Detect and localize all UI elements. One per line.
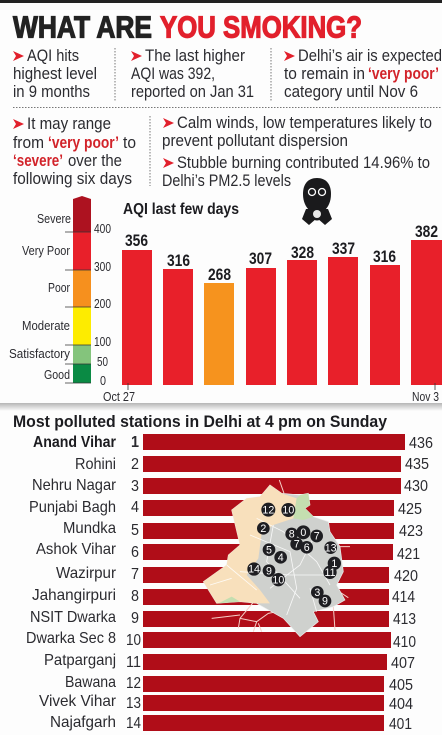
station names: Patparganj xyxy=(44,652,116,669)
AQI scale legend: 0 xyxy=(100,373,106,388)
station ranks: 8 xyxy=(131,588,139,605)
station names: Mundka xyxy=(63,520,116,537)
title xyxy=(13,10,362,44)
station values: 414 xyxy=(392,589,415,606)
bar chart: AQI last few days: 307 xyxy=(249,250,272,268)
internal roads xyxy=(210,518,337,615)
station ranks: 12 xyxy=(126,675,141,692)
station values: 405 xyxy=(389,677,413,694)
text block: AQI highest level: highest level xyxy=(13,65,97,83)
station ranks: 14 xyxy=(126,715,141,732)
station names: Dwarka Sec 8 xyxy=(26,630,116,647)
title: WHAT ARE xyxy=(13,10,152,44)
map roads outside boundary xyxy=(212,480,350,632)
station names: Nehru Nagar xyxy=(32,477,117,494)
bar chart: AQI last few days: 316 xyxy=(167,252,190,270)
text block: air expected to remain very poor: category until Nov 6 xyxy=(284,83,418,101)
AQI scale legend: 100 xyxy=(94,334,111,349)
station names: Bawana xyxy=(65,674,116,691)
station markers: 1 xyxy=(331,558,337,570)
text block: AQI highest level: in 9 months xyxy=(13,83,90,101)
station markers: 8 xyxy=(289,529,295,541)
bar chart: AQI last few days: 328 xyxy=(291,244,314,262)
station markers: 12 xyxy=(262,504,274,516)
title: YOU SMOKING? xyxy=(160,10,362,44)
AQI scale legend: 200 xyxy=(94,296,111,311)
text block: AQI highest level xyxy=(13,47,97,101)
station values: 407 xyxy=(391,655,415,672)
station markers: 6 xyxy=(304,542,310,554)
text block: may range very poor to severe: ‘severe’ xyxy=(13,152,63,170)
station markers: 7 xyxy=(314,531,320,543)
text block: stubble burning xyxy=(162,154,430,190)
text block: last higher AQI: The last higher xyxy=(145,47,245,65)
AQI scale legend: Satisfactory xyxy=(9,346,70,361)
green zones xyxy=(218,493,313,603)
station names: Najafgarh xyxy=(50,714,116,731)
AQI scale legend: 50 xyxy=(97,354,108,369)
text block: may range very poor to severe: over the xyxy=(68,152,122,170)
station ranks: 1 xyxy=(131,434,139,451)
AQI scale legend: Severe xyxy=(37,211,71,226)
station ranks: 3 xyxy=(131,478,139,495)
station ranks xyxy=(126,434,141,732)
AQI scale legend: 300 xyxy=(94,259,111,274)
station markers: 14 xyxy=(248,564,260,576)
bar chart: AQI last few days: 337 xyxy=(332,240,355,258)
station markers: 0 xyxy=(300,527,306,539)
text block: last higher AQI: reported on Jan 31 xyxy=(131,83,254,101)
station values: 401 xyxy=(389,716,412,733)
station values: 436 xyxy=(409,435,433,452)
station markers: 11 xyxy=(324,567,336,579)
station ranks: 6 xyxy=(131,544,139,561)
text block: stubble burning: Delhi’s PM2.5 levels xyxy=(162,172,291,190)
station ranks: 11 xyxy=(126,654,141,671)
bar chart: AQI last few days: 382 xyxy=(415,223,438,241)
severe band with arrow xyxy=(73,196,91,232)
text block: calm winds xyxy=(162,114,432,150)
icon: gas mask xyxy=(302,178,332,225)
AQI scale legend: Moderate xyxy=(22,318,70,333)
bar chart: AQI last few days: 268 xyxy=(208,266,231,284)
text block: air expected to remain very poor xyxy=(284,47,442,101)
station ranks: 13 xyxy=(126,695,141,712)
station values: 435 xyxy=(405,456,429,473)
station values: 425 xyxy=(398,501,422,518)
text block: may range very poor to severe xyxy=(13,115,136,188)
station markers: 10 xyxy=(282,505,294,517)
text block: may range very poor to severe: ‘very poor’ xyxy=(48,134,119,152)
station values: 410 xyxy=(393,634,416,651)
station markers xyxy=(247,503,341,608)
station values: 413 xyxy=(393,611,416,628)
station values: 404 xyxy=(389,696,413,713)
text block: may range very poor to severe: It may range xyxy=(27,115,111,133)
station markers: 5 xyxy=(266,544,272,556)
text block: may range very poor to severe: to xyxy=(123,134,136,152)
bar chart: station AQI xyxy=(26,434,433,733)
station ranks: 5 xyxy=(131,522,139,539)
station ranks: 9 xyxy=(131,610,139,627)
station names: Rohini xyxy=(75,456,116,473)
AQI scale legend: Poor xyxy=(48,280,71,295)
text block: AQI highest level: AQI hits xyxy=(27,47,79,65)
AQI scale legend: Good xyxy=(44,367,70,382)
station ranks: 7 xyxy=(131,566,139,583)
station ranks: 2 xyxy=(131,456,139,473)
rural peach zones xyxy=(203,485,297,603)
station names xyxy=(26,434,117,731)
station names: Jahangirpuri xyxy=(32,587,116,604)
station markers: 4 xyxy=(278,552,284,564)
station markers: 10 xyxy=(272,574,284,586)
station markers: 7 xyxy=(294,539,300,551)
text block: last higher AQI: AQI was 392, xyxy=(131,65,215,83)
bar chart: AQI last few days: Oct 27 xyxy=(103,389,135,404)
station values: 421 xyxy=(397,546,420,563)
station names: Ashok Vihar xyxy=(36,541,117,558)
station values: 420 xyxy=(394,568,418,585)
heading: most polluted stations: Most polluted stations in Delhi at 4 pm on Sunday xyxy=(13,412,388,431)
chart heading: AQI last few days xyxy=(123,201,239,218)
station markers: 2 xyxy=(260,523,266,535)
AQI scale legend xyxy=(9,196,111,388)
station markers: 9 xyxy=(322,596,328,608)
text block: last higher AQI xyxy=(131,47,254,101)
bar chart: AQI last few days xyxy=(103,223,442,404)
text block: may range very poor to severe: following six days xyxy=(13,170,132,188)
AQI scale legend: 400 xyxy=(94,221,111,236)
station ranks: 4 xyxy=(131,499,139,516)
bar chart: AQI last few days: 316 xyxy=(373,248,396,266)
station values: 423 xyxy=(399,523,423,540)
map of Delhi with station markers xyxy=(203,480,350,637)
station markers: 3 xyxy=(314,587,320,599)
station names: Wazirpur xyxy=(56,565,117,582)
station names: NSIT Dwarka xyxy=(30,609,116,626)
bar chart: AQI last few days: 356 xyxy=(125,232,148,250)
text block: may range very poor to severe: from xyxy=(13,134,44,152)
station bars xyxy=(143,434,405,731)
station ranks: 10 xyxy=(126,632,141,649)
text block: air expected to remain very poor: to remain in xyxy=(284,65,365,83)
station markers: 9 xyxy=(266,565,272,577)
text block: calm winds: prevent pollutant dispersion xyxy=(162,132,348,150)
station values xyxy=(389,435,433,733)
station values: 430 xyxy=(404,478,428,495)
station markers: 13 xyxy=(325,542,337,554)
station names: Punjabi Bagh xyxy=(29,499,116,516)
station names: Vivek Vihar xyxy=(39,693,117,710)
map boundary xyxy=(203,485,345,637)
station names: Anand Vihar xyxy=(33,434,116,451)
AQI scale legend: Very Poor xyxy=(22,243,71,258)
